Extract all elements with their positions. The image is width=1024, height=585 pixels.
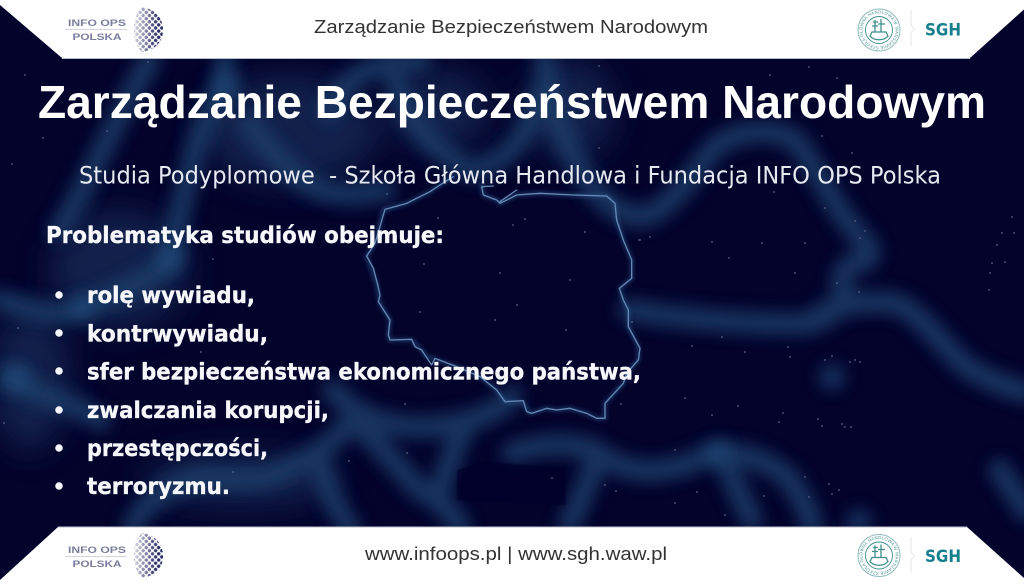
logo globe top (134, 7, 163, 52)
logo subtitle top: POLSKA (72, 32, 122, 43)
title: Zarządzanie Bezpieczeństwem Narodowym (38, 76, 986, 128)
map of Poland (367, 177, 640, 418)
item 4: zwalczania korupcji, (87, 398, 329, 424)
seal lettering top: SZKOŁA GŁÓWNA HANDLOWA W WARSZAWIE (858, 10, 899, 50)
stars (4, 62, 1014, 515)
divider bottom (911, 537, 914, 573)
seal lettering bottom: SZKOŁA GŁÓWNA HANDLOWA W WARSZAWIE (858, 536, 899, 576)
item 3: sfer bezpieczeństwa ekonomicznego państwa, (87, 360, 641, 386)
nebula broad haze (0, 60, 615, 508)
item 6: terroryzmu. (87, 474, 230, 500)
logo: INFO OPS bottom (65, 533, 163, 578)
logo: SGH top (858, 8, 961, 52)
logo: SGH bottom (858, 534, 961, 577)
top band edge (58, 58, 970, 527)
logo: INFO OPS top (65, 7, 163, 52)
section heading: Problematyka studiów obejmuje: (46, 221, 444, 249)
divider top (911, 10, 914, 46)
item 1: rolę wywiadu, (87, 283, 255, 309)
logo wordmark top: INFO OPS (68, 18, 126, 29)
logo subtitle bottom: POLSKA (72, 559, 122, 570)
top band (0, 0, 1024, 58)
item 2: kontrwywiadu, (87, 322, 268, 348)
seal top (858, 9, 900, 51)
SGH wordmark top: SGH (925, 20, 961, 40)
subtitle: Studia Podyplomowe - Szkoła Główna Handlowa i Fundacja INFO OPS Polska (79, 162, 941, 190)
header text: Zarządzanie Bezpieczeństwem Narodowym (314, 16, 708, 37)
nebula web (0, 60, 1024, 527)
nebula glows (3, 74, 872, 535)
footer text: www.infoops.pl | www.sgh.waw.pl (364, 543, 667, 564)
bottom band (0, 527, 1024, 585)
bullet list (55, 283, 641, 500)
item 5: przestępczości, (87, 436, 268, 462)
dark shape lower centre (457, 462, 566, 505)
logo globe bottom (134, 533, 163, 578)
seal bottom (858, 534, 900, 576)
logo wordmark bottom: INFO OPS (68, 545, 126, 556)
SGH wordmark bottom: SGH (925, 547, 961, 567)
